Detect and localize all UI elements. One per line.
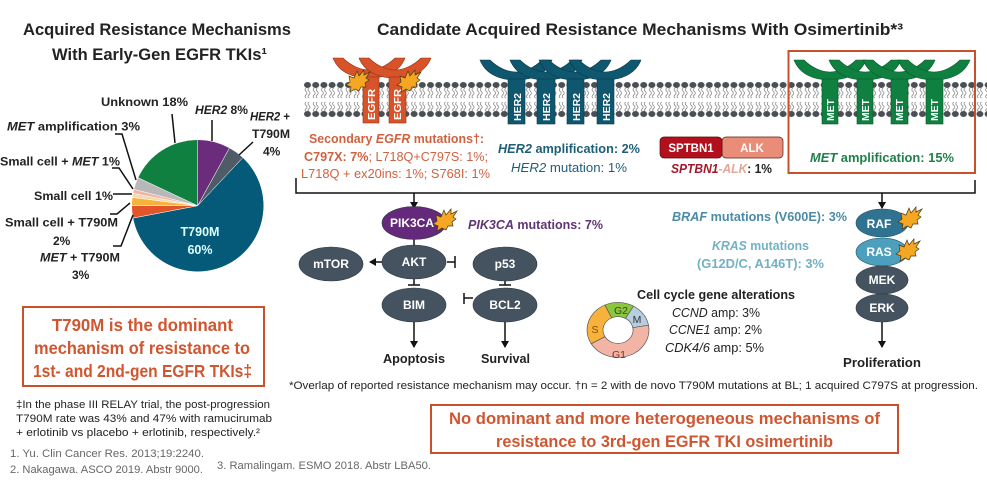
label: KRAS <box>697 239 824 271</box>
pathway: PI3K AKT <box>299 206 537 366</box>
pie labels: 2% <box>53 234 71 248</box>
pathway: PI3K AKT: Apoptosis <box>383 351 445 366</box>
callout: T790M dominant: T790M is the dominant <box>52 315 233 335</box>
footnote: overlap: *Overlap of reported resistance mechanism may occur. †n = 2 with de novo T790M mutations at BL; 1 acquired C797S at progression. <box>289 380 978 392</box>
receptor: MET amplification: MET <box>895 99 906 121</box>
receptor: HER2 amplification: HER2 <box>513 93 524 121</box>
pathway: RAS RAF MEK ERK: ERK <box>869 301 895 315</box>
pie center label: T790M <box>181 225 219 239</box>
pathway: PI3K AKT: p53 <box>495 257 516 271</box>
fusion: SPTBN1-ALK: SPTBN1-ALK: 1% <box>671 162 772 176</box>
references: 2. Nakagawa. ASCO 2019. Abstr 9000. <box>10 464 203 476</box>
callout: T790M dominant <box>23 307 264 386</box>
label: HER2 <box>498 142 640 175</box>
pie labels: 3% <box>72 268 90 282</box>
pie leader lines <box>110 114 253 246</box>
cell cycle donut: G1 <box>612 349 626 361</box>
receptor: HER2 amplification: HER2 <box>602 93 613 121</box>
cell cycle donut: G2 <box>614 305 628 317</box>
footnote: RELAY trial: + erlotinib vs placebo + erlotinib, respectively.² <box>16 427 260 439</box>
pie center label <box>181 225 219 257</box>
pie labels: Small cell + MET 1% <box>0 154 120 168</box>
label: EGFR mutations <box>301 132 490 181</box>
pathway: RAS RAF MEK ERK: RAF <box>867 217 891 231</box>
callout: no dominant mechanism <box>431 405 898 453</box>
highlight box: MET <box>788 51 975 173</box>
pie chart: resistance mechanisms <box>132 140 264 272</box>
label: HER2: HER2 mutation: 1% <box>511 161 627 175</box>
cell cycle donut: S <box>591 324 599 336</box>
title: early-gen resistance: Acquired Resistance Mechanisms <box>23 20 291 39</box>
receptor: HER2 amplification: HER2 <box>572 93 583 121</box>
pie labels: HER2 + <box>250 110 290 124</box>
callout: no dominant mechanism: No dominant and more heterogeneous mechanisms of <box>449 410 880 428</box>
pie labels: 4% <box>263 144 281 158</box>
label: MET amplification: MET amplification: 15% <box>810 151 954 165</box>
receptor: MET amplification: MET <box>861 99 872 121</box>
receptor: EGFR dimer: EGFR <box>393 88 404 120</box>
label: EGFR mutations: C797X: 7%; L718Q+C797S: 1%; <box>304 150 488 164</box>
pie labels: HER2 8% <box>195 103 248 117</box>
pathway: PI3K AKT: AKT <box>402 255 427 269</box>
title: osimertinib resistance: Candidate Acquired Resistance Mechanisms With Osimertinib*³ <box>377 20 903 39</box>
fusion: SPTBN1-ALK <box>660 137 783 176</box>
label: cell cycle gene alterations <box>637 288 795 355</box>
pie labels: Unknown 18% <box>101 95 188 109</box>
receptor: MET amplification: MET <box>930 99 941 121</box>
label: EGFR mutations: Secondary EGFR mutations†: <box>309 132 484 146</box>
label: cell cycle gene alterations: CDK4/6 amp: 5% <box>665 341 764 355</box>
label: HER2: HER2 amplification: 2% <box>498 142 640 156</box>
pathway: RAS RAF MEK ERK: Proliferation <box>843 355 921 370</box>
bracket connector <box>296 178 975 208</box>
pie labels: Small cell + T790M <box>5 216 118 230</box>
footnote: RELAY trial: ‡In the phase III RELAY trial, the post-progression <box>16 399 270 411</box>
footnote: RELAY trial <box>16 399 272 439</box>
pathway: PI3K AKT: PIK3CA <box>390 216 434 230</box>
references: 1. Yu. Clin Cancer Res. 2013;19:2240. <box>10 448 204 460</box>
pie labels: T790M <box>252 127 290 141</box>
cell cycle donut: M <box>633 314 641 326</box>
receptor: EGFR dimer: EGFR <box>367 88 378 120</box>
fusion: SPTBN1-ALK: ALK <box>740 143 765 155</box>
cell cycle donut <box>587 302 649 361</box>
title: early-gen resistance <box>23 20 291 64</box>
label: cell cycle gene alterations: CCND amp: 3% <box>672 306 760 320</box>
pie center label: 60% <box>187 243 213 257</box>
receptor: MET amplification <box>794 60 970 124</box>
pathway: RAS RAF MEK ERK: MEK <box>869 273 896 287</box>
callout: no dominant mechanism: resistance to 3rd-gen EGFR TKI osimertinib <box>496 433 833 451</box>
pie labels: MET + T790M <box>40 250 120 264</box>
label: KRAS: KRAS mutations <box>712 239 809 253</box>
label: cell cycle gene alterations: CCNE1 amp: 2% <box>669 323 762 337</box>
pathway: RAS RAF MEK ERK: RAS <box>866 245 892 259</box>
callout: T790M dominant: 1st- and 2nd-gen EGFR TKIs‡ <box>33 361 252 381</box>
pathway: PI3K AKT: mTOR <box>313 257 349 271</box>
receptor: MET amplification: MET <box>826 99 837 121</box>
pathway: PI3K AKT: BCL2 <box>489 298 521 312</box>
pie labels: MET amplification 3% <box>7 120 140 134</box>
pathway: RAS RAF MEK ERK <box>843 207 922 370</box>
label: KRAS: (G12D/C, A146T): 3% <box>697 257 824 271</box>
label: BRAF: BRAF mutations (V600E): 3% <box>672 210 847 224</box>
receptor: EGFR dimer <box>333 58 431 123</box>
references <box>10 448 431 476</box>
callout: T790M dominant: mechanism of resistance to <box>34 338 250 358</box>
footnote: RELAY trial: T790M rate was 43% and 47% with ramucirumab <box>16 413 272 425</box>
receptor: HER2 amplification <box>480 60 641 124</box>
label: EGFR mutations: L718Q + ex20ins: 1%; S768I: 1% <box>301 167 490 181</box>
cell membrane <box>303 81 987 119</box>
pie labels <box>0 95 290 282</box>
label: cell cycle gene alterations: Cell cycle gene alterations <box>637 288 795 302</box>
pie labels: Small cell 1% <box>34 189 113 203</box>
fusion: SPTBN1-ALK: SPTBN1 <box>668 143 714 155</box>
references: 3. Ramalingam. ESMO 2018. Abstr LBA50. <box>217 460 431 472</box>
pathway: PI3K AKT: BIM <box>403 298 425 312</box>
pathway: PI3K AKT: Survival <box>481 351 530 366</box>
title: early-gen resistance: With Early-Gen EGFR TKIs¹ <box>52 45 267 64</box>
receptor: HER2 amplification: HER2 <box>542 93 553 121</box>
label: PIK3CA mutations: PIK3CA mutations: 7% <box>468 218 603 232</box>
